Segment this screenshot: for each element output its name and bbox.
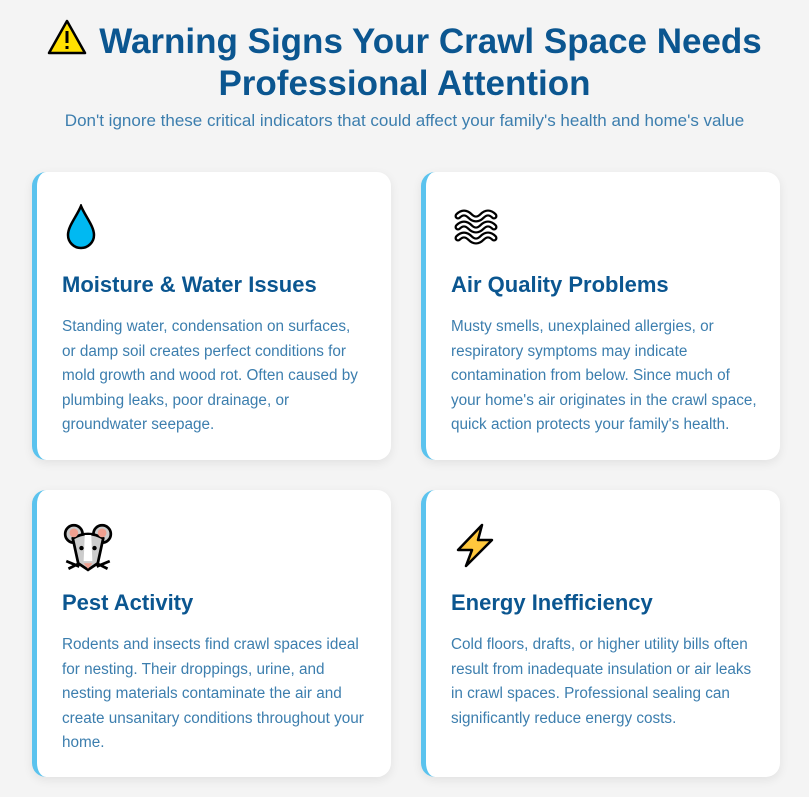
panel: pest (32, 490, 391, 777)
panel: pest: Rodents and insects find crawl spaces ideal for nesting. Their droppings, urine, and nesting materials contaminate the air and create unsanitary conditions throughout your home. (62, 636, 364, 751)
icon: warning (48, 20, 86, 54)
panel: moisture (32, 172, 391, 460)
panel: moisture: Standing water, condensation on surfaces, or damp soil creates perfect conditions for mold growth and wood rot. Often caused by plumbing leaks, poor drainage, or groundwater seepage. (62, 318, 358, 433)
panel: air quality: Air Quality Problems (451, 272, 669, 297)
icon: waves (454, 210, 498, 244)
title (48, 20, 762, 103)
panel: energy: Energy Inefficiency (451, 590, 653, 615)
panel: air quality (421, 172, 780, 460)
title: Professional Attention (218, 64, 591, 103)
icon: lightning (456, 524, 494, 568)
panel: energy: Cold floors, drafts, or higher utility bills often result from inadequate insulation or air leaks in crawl spaces. Professional sealing can significantly reduce energy costs. (451, 636, 751, 726)
title: Warning Signs Your Crawl Space Needs (99, 22, 762, 61)
panel: air quality: Musty smells, unexplained allergies, or respiratory symptoms may indicate contamination from below. Since much of your home's air originates in the crawl space, quick action protects your family's health. (451, 318, 757, 433)
panel: moisture: Moisture & Water Issues (62, 272, 317, 297)
subtitle: Don't ignore these critical indicators that could affect your family's health and home's value (65, 111, 744, 130)
panel: pest: Pest Activity (62, 590, 193, 615)
icon: water drop (66, 204, 96, 250)
panel: energy (421, 490, 780, 777)
icon: mouse (64, 524, 112, 572)
